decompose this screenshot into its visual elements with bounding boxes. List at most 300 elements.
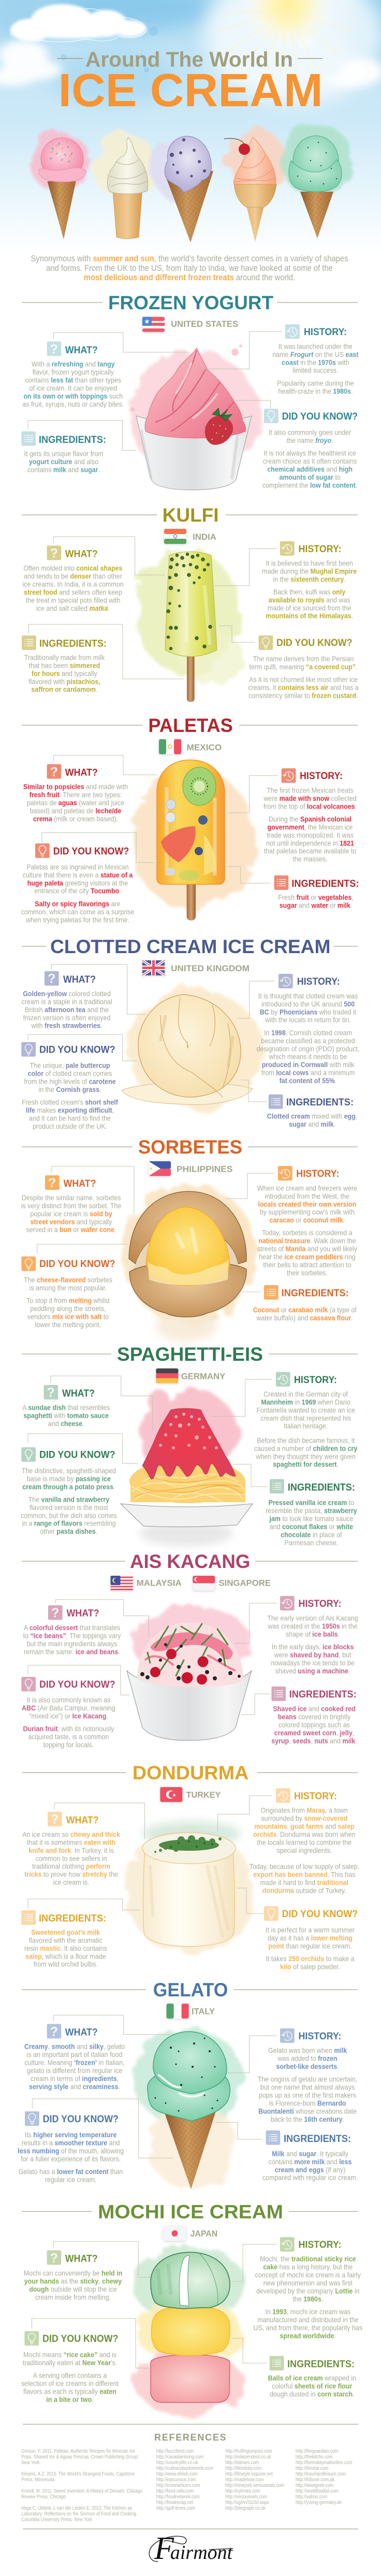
- text: what: and cheese.: [48, 1419, 84, 1428]
- text: history: The early version of Ais Kacang: [267, 1614, 358, 1622]
- text: what: [23, 1623, 121, 1656]
- icon: clock: [276, 1372, 290, 1387]
- text: web references column 2: http://independent.co.uk: [225, 2454, 271, 2459]
- text: web references column 3: http://thekitchn.com: [296, 2454, 333, 2459]
- text: history: Before the dish became famous, it: [257, 1436, 355, 1445]
- text: history: cake has a long history, but the: [263, 2263, 353, 2271]
- heading: did you know: DID YOU KNOW?: [276, 638, 352, 649]
- text: did you know: Salty or spicy flavorings are: [35, 900, 121, 908]
- text: web references column 3: http://young-germany.de: [296, 2499, 342, 2505]
- text: what: [21, 989, 112, 1030]
- icon: light bulb: [264, 1906, 279, 1921]
- text: history: [267, 1614, 358, 1675]
- flag: united states: UNITED STATES: [171, 319, 238, 329]
- text: web references column 3: [296, 2448, 353, 2505]
- heading: frozen yogurt: FROZEN YOGURT: [108, 292, 273, 313]
- intro text: [31, 254, 348, 282]
- text: history: shaved using a machine.: [275, 1667, 350, 1675]
- flag: philippines: PHILIPPINES: [177, 1164, 233, 1174]
- text: what: Despite the similar name, sorbetes: [22, 1193, 121, 1202]
- panel: history: [258, 2028, 357, 2123]
- text: history: is Florence-born Bernardo: [269, 2099, 346, 2107]
- text: history: Mochi, the traditional sticky rice: [260, 2255, 356, 2263]
- illustration: spaghetti ice cream: [121, 1388, 253, 1546]
- panel: what: [22, 341, 124, 408]
- panel: what: [22, 1385, 110, 1428]
- heading: history: HISTORY:: [294, 1375, 337, 1386]
- text: what: street food and sellers often keep: [24, 588, 122, 596]
- text: what: popular ice cream is sold by: [30, 1210, 112, 1218]
- text: did you know: when trying paletas for the first time.: [25, 916, 129, 924]
- text: ingredients: sugar and milk.: [289, 1120, 335, 1128]
- heading: did you know: DID YOU KNOW?: [282, 411, 358, 422]
- text: did you know: Fresh clotted cream's short shelf: [22, 1098, 118, 1106]
- text: web references column 1: http://ezinearticles.com: [156, 2482, 200, 2488]
- text: history: The first frozen Mexican treats: [267, 786, 354, 795]
- text: did you know: entrance of the city Tocumbo.: [34, 887, 121, 895]
- text: web references column 1: http://foodrecap.net: [156, 2499, 194, 2505]
- text: web references column 1: [156, 2448, 213, 2511]
- text: ingredients: Coconut or carabao milk (a type of: [253, 1306, 357, 1314]
- text: did you know: The distinctive, spaghetti-shaped: [22, 1466, 116, 1475]
- flag: malaysia: [111, 1576, 182, 1591]
- text: what: [22, 1403, 110, 1428]
- icon: question mark: [48, 1812, 62, 1827]
- icon: question mark: ?: [47, 1386, 55, 1400]
- icon: list: [21, 1910, 36, 1925]
- title: [57, 48, 323, 117]
- text: history: was added to frozen: [277, 2054, 337, 2063]
- text: book references: Klepeis, A.Z. 2015. The World's Strangest Foods. Capstone: [21, 2471, 135, 2477]
- illustration: blueberry scoop cone: [150, 136, 213, 242]
- flag: germany: [156, 1369, 226, 1383]
- panel: history: [257, 1166, 357, 1277]
- text: history: mountains of the Himalayas.: [266, 612, 353, 620]
- text: did you know: [18, 2131, 124, 2184]
- text: history: Mannheim in 1969 when Dario: [261, 1398, 350, 1406]
- text: web references column 2: http://seriouseats.com: [225, 2494, 268, 2499]
- text: did you know: peddling along the streets,: [30, 1304, 106, 1313]
- text: what: serving style and creaminess.: [29, 2082, 120, 2091]
- text: web references column 2: [225, 2448, 285, 2511]
- text: ingredients: flavored with pistachios,: [28, 678, 100, 685]
- text: web references column 3: http://travelandleisure.com: [296, 2471, 346, 2477]
- text: what: A colorful dessert that translates: [24, 1623, 120, 1632]
- panel: ingredients: [266, 1479, 357, 1547]
- panel: did you know: [21, 1257, 115, 1329]
- icon: light bulb: [21, 1042, 36, 1057]
- text: ingredients: flavored with the aromatic: [29, 1936, 102, 1945]
- text: did you know: point than regular ice cream.: [268, 1942, 352, 1950]
- text: history: introduced from the West, the: [265, 1192, 349, 1200]
- heading: sorbetes: SORBETES: [138, 1136, 242, 1158]
- text: web references column 3: http://yahoo.com: [296, 2494, 328, 2499]
- icon: light bulb: [21, 1257, 36, 1271]
- text: ingredients: from wild orchid bulbs.: [34, 1960, 98, 1968]
- text: ingredients: [24, 653, 105, 694]
- text: did you know: from the high levels of carotene: [24, 1077, 116, 1086]
- icon: question mark: [47, 545, 61, 560]
- text: did you know: The unique, pale buttercup: [30, 1061, 110, 1070]
- text: what: [24, 2042, 125, 2091]
- icon: light bulb: [25, 2111, 39, 2126]
- text: history: orchids. Dondurma was born when: [253, 1830, 355, 1838]
- text: what: as fruit, syrups, nuts or candy bites.: [22, 400, 124, 408]
- heading: ingredients: INGREDIENTS:: [284, 2134, 351, 2145]
- text: web references column 1: http://www.delish.com: [156, 2471, 198, 2477]
- icon: light bulb: [21, 1447, 36, 1462]
- text: did you know: It is perfect for a warm summer: [266, 1926, 355, 1934]
- heading: did you know: DID YOU KNOW?: [53, 846, 129, 857]
- text: what: [21, 1193, 121, 1234]
- panel: kulfi: [22, 505, 359, 702]
- text: did you know: As it is not churned like most other ice: [249, 675, 358, 684]
- panel: ingredients: [274, 875, 359, 910]
- text: history: national treasure. Walk down the: [258, 1236, 356, 1245]
- illustration: clotted cream scoop: [122, 989, 261, 1109]
- panel: references: [21, 2424, 358, 2529]
- text: what: Golden-yellow colored clotted: [23, 989, 111, 998]
- panel: ingredients: [21, 431, 106, 473]
- text: history: from local cows and a minimum: [261, 1069, 355, 1077]
- icon: list: [270, 1479, 284, 1493]
- flag: turkey: ★: [172, 1792, 177, 1797]
- heading: history: HISTORY:: [294, 1791, 337, 1802]
- text: history: sorbet-like desserts.: [276, 2062, 339, 2070]
- heading: did you know: DID YOU KNOW?: [42, 2334, 118, 2344]
- heading: references: REFERENCES: [154, 2433, 226, 2443]
- text: did you know: [262, 428, 357, 490]
- icon: clock: [280, 1596, 295, 1610]
- panel: did you know: [21, 843, 134, 924]
- panel: what: [24, 2250, 122, 2301]
- icon: question mark: [45, 971, 59, 986]
- heading: did you know: DID YOU KNOW?: [282, 1909, 358, 1920]
- heading: paletas: PALETAS: [148, 715, 233, 736]
- heading: what: WHAT?: [62, 1388, 95, 1399]
- text: history: It was launched under the: [279, 342, 353, 351]
- heading: clotted cream ice cream: CLOTTED CREAM ICE CREAM: [50, 936, 330, 957]
- text: did you know: topping for locals.: [43, 1740, 94, 1749]
- text: ingredients: Pressed vanilla ice cream to: [269, 1499, 354, 1507]
- text: did you know: common, which can come as a surprise: [21, 908, 134, 916]
- text: web references column 2: http://madehow.com: [225, 2477, 264, 2482]
- text: did you know: To stop it from melting whilst: [26, 1297, 110, 1305]
- intro text: Synonymous with summer and sun, the world's favorite dessert comes in a variety of shapes: [31, 254, 348, 264]
- hero: five ice cream cones: [30, 124, 353, 242]
- icon: light bulb: [264, 409, 279, 423]
- text: ingredients: jam to look like tomato sauce: [269, 1515, 353, 1523]
- icon: question mark: [45, 1175, 60, 1190]
- heading: what: WHAT?: [63, 974, 96, 985]
- text: ingredients: saffron or cardamom.: [31, 685, 97, 694]
- text: history: fat content of 55%.: [280, 1076, 336, 1085]
- text: did you know: cream choice as it often contains: [263, 457, 357, 465]
- text: did you know: [21, 863, 134, 924]
- text: history: trade was monopolized. It was: [267, 831, 354, 839]
- text: what: served in a bun or wafer cone.: [26, 1226, 116, 1234]
- icon: clock: [280, 541, 295, 556]
- text: history: was created in the 1950s in the: [267, 1622, 358, 1630]
- panel: ingredients: [22, 636, 107, 694]
- heading: did you know: DID YOU KNOW?: [39, 1449, 115, 1461]
- heading: history: HISTORY:: [296, 1169, 339, 1179]
- panel: what: [22, 545, 124, 612]
- text: what: traditional clothing perform: [32, 1862, 110, 1870]
- text: web references column 3: http://themalaymailonline.com: [296, 2459, 353, 2465]
- text: web references column 1: http://canadianliving.com: [156, 2454, 203, 2459]
- panel: what: [24, 2024, 125, 2091]
- heading: mochi ice cream: MOCHI ICE CREAM: [98, 2201, 283, 2222]
- text: history: limited success.: [292, 366, 338, 375]
- heading: what: WHAT?: [65, 2027, 98, 2038]
- panel: history: [254, 2237, 362, 2340]
- text: history: Fontanella wanted to create an ice: [256, 1406, 355, 1414]
- text: what: paletas de aguas (water and juice: [27, 799, 124, 807]
- text: did you know: Its higher serving temperature: [25, 2131, 117, 2139]
- text: did you know: The vanilla and strawberry: [28, 1495, 110, 1504]
- text: history: It is believed to have first been: [266, 559, 353, 567]
- panel: history: [263, 768, 357, 863]
- text: did you know: regular ice cream.: [45, 2176, 96, 2184]
- text: did you know: [22, 1696, 115, 1749]
- text: history: hear the ice cream peddlers ring: [259, 1253, 356, 1261]
- text: web references column 3: http://wisegeek.com: [296, 2482, 334, 2488]
- text: did you know: other pasta dishes.: [40, 1527, 97, 1535]
- text: history: made during the Mughal Empire: [262, 567, 357, 575]
- flag: united states: [142, 317, 238, 332]
- flag: italy: ITALY: [192, 2007, 215, 2017]
- text: did you know: color of clotted cream comes: [28, 1069, 112, 1077]
- flag: turkey: TURKEY: [186, 1790, 221, 1800]
- illustration: dondurma cylinder with pistachio: [124, 1821, 254, 1953]
- icon: question mark: ?: [50, 2024, 58, 2039]
- icon: list: [21, 431, 36, 446]
- text: ingredients: creamed sweet corn, jelly,: [274, 1729, 354, 1737]
- text: did you know: less numbing of the mouth, allowing: [18, 2147, 124, 2155]
- text: what: crema (milk or cream based).: [33, 815, 118, 823]
- panel: what: [21, 1175, 121, 1234]
- text: history: [263, 786, 357, 863]
- heading: ingredients: INGREDIENTS:: [39, 638, 107, 650]
- text: what: with fresh strawberries.: [31, 1021, 102, 1030]
- text: history: the 1980s.: [292, 2295, 323, 2303]
- text: did you know: complement the low fat content.: [262, 481, 357, 490]
- heading: history: HISTORY:: [298, 544, 342, 555]
- text: history: surrounded by snow-covered: [261, 1814, 347, 1822]
- heading: history: HISTORY:: [300, 771, 343, 782]
- text: ingredients: colored toppings such as: [279, 1721, 350, 1729]
- text: book references: Laboratory: Reflections on the Science of Food and Cooking.: [21, 2511, 137, 2516]
- text: what: [22, 564, 124, 612]
- panel: did you know: [21, 1447, 117, 1535]
- text: ingredients: dough dusted in corn starch.: [270, 2390, 355, 2398]
- flag: india: [164, 529, 216, 544]
- text: did you know: product outside of the UK.: [33, 1122, 107, 1130]
- text: ingredients: Clotted cream mixed with egg,: [267, 1112, 357, 1120]
- text: web references column 2: http://lifestyle.inquirer.net: [225, 2471, 273, 2477]
- text: did you know: in the Cornish grass.: [38, 1085, 101, 1093]
- text: what: remain the same: ice and beans.: [24, 1648, 120, 1656]
- heading: what: WHAT?: [67, 1608, 99, 1619]
- text: history: caused a number of children to cry: [254, 1444, 358, 1452]
- text: history: spread worldwide.: [280, 2332, 336, 2340]
- text: history: locals created their own version: [258, 1200, 356, 1208]
- panel: ingredients: [271, 1687, 357, 1745]
- hero: sky watercolor background: [0, 0, 381, 254]
- icon: light bulb: [24, 2331, 39, 2345]
- panel: what: [23, 764, 128, 823]
- panel: what: [21, 971, 112, 1030]
- illustration: sorbetes in a bun: [122, 1184, 256, 1342]
- flag: singapore: SINGAPORE: [218, 1578, 271, 1588]
- heading: ingredients: INGREDIENTS:: [282, 1288, 349, 1299]
- illustration: orange soft serve with cherry: [224, 129, 286, 242]
- heading: what: WHAT?: [63, 1178, 96, 1189]
- text: did you know: consistency similar to frozen custard.: [248, 692, 358, 700]
- heading: history: HISTORY:: [298, 1599, 342, 1609]
- flag: india: INDIA: [193, 532, 216, 542]
- panel: history: [272, 324, 359, 395]
- text: what: that it is sometimes eaten with: [27, 1838, 115, 1847]
- panel: history: [257, 974, 359, 1085]
- heading: ingredients: INGREDIENTS:: [288, 1483, 355, 1493]
- text: did you know: Durian fruit, with its notoriously: [23, 1724, 114, 1733]
- text: did you know: It is not always the healthiest ice: [263, 449, 356, 457]
- intro text: and forms. From the UK to the US, from Italy to India, we have looked at some of the: [46, 264, 333, 273]
- text: what: tricks to prove how stretchy the: [24, 1870, 118, 1878]
- text: what: Similar to popsicles and made with: [23, 783, 128, 791]
- text: history: nowadays the ice tends to be: [271, 1659, 355, 1667]
- flag: germany: GERMANY: [181, 1371, 226, 1381]
- text: web references column 1: http://food.ndtv.com: [156, 2488, 194, 2494]
- text: what: frozen version is often enjoyed: [23, 1014, 110, 1021]
- heading: ingredients: INGREDIENTS:: [39, 435, 106, 445]
- text: what: ice cream is.: [53, 1878, 90, 1887]
- text: what: but the main ingredients always: [27, 1639, 118, 1648]
- icon: question mark: ?: [51, 1812, 58, 1827]
- icon: cloud top left: [10, 4, 146, 42]
- text: history: their sorbetes.: [287, 1269, 328, 1277]
- heading: ingredients: INGREDIENTS:: [287, 2359, 355, 2370]
- text: ingredients: [267, 1112, 357, 1128]
- text: ingredients: [24, 450, 104, 473]
- text: did you know: The name derives from the Persian: [253, 655, 354, 663]
- text: ingredients: cream and eggs (if any): [275, 2166, 345, 2174]
- text: history: when they thought they were given: [255, 1452, 356, 1460]
- panel: did you know: [264, 1906, 358, 1971]
- panel: ais kacang: [21, 1551, 358, 1749]
- text: did you know: Paletas are so ingrained in Mexican: [26, 863, 129, 871]
- panel: what: [22, 1812, 121, 1887]
- title line 1: Around The World In: [85, 48, 293, 71]
- text: book references: Columbia University Press: New York: [21, 2516, 92, 2522]
- text: did you know: results in a smoother texture and: [22, 2139, 120, 2147]
- text: history: Back then, kulfi was only: [273, 588, 346, 596]
- heading: what: WHAT?: [65, 549, 98, 559]
- text: what: flavor, frozen yogurt typically: [33, 368, 114, 376]
- text: did you know: lower the melting point.: [35, 1320, 101, 1329]
- panel: did you know: [21, 1042, 118, 1130]
- text: history: with the locals in return for tin.: [265, 1016, 351, 1024]
- text: what: is very distinct from the sorbet. The: [21, 1202, 121, 1210]
- text: what: of ice cream. It can be enjoyed: [29, 384, 117, 392]
- text: did you know: flavors as each is typically eaten: [23, 2387, 116, 2396]
- text: history: streets of Manila and you will likely: [257, 1245, 357, 1253]
- text: history: made of ice sourced from the: [268, 604, 351, 612]
- text: what: Often molded into conical shapes: [23, 564, 123, 572]
- text: history: their bells to attract attention to: [263, 1261, 351, 1269]
- panel: ingredients: [267, 1095, 357, 1128]
- icon: clock: [280, 2028, 295, 2043]
- text: what: knife and fork. In Turkey, it is: [28, 1846, 114, 1854]
- text: web references column 2: http://sg/en/SG50.aspx: [225, 2499, 269, 2505]
- panel: history: [267, 1596, 358, 1675]
- text: history: the locals learned to combine the: [257, 1838, 351, 1847]
- text: history: Gelato was born when milk: [268, 2046, 347, 2054]
- text: did you know: [266, 1926, 355, 1971]
- text: what: cream is a staple in a traditional: [21, 998, 112, 1006]
- icon: cloud right: [327, 59, 381, 87]
- text: did you know: chemical additives and high: [267, 465, 353, 473]
- text: book references: Gerson, F. 2011. Paletas: Authentic Recipes for Mexican Ice: [21, 2448, 135, 2454]
- text: did you know: the name froyo.: [287, 436, 333, 444]
- panel: ingredients: [253, 1285, 357, 1322]
- heading: history: HISTORY:: [297, 976, 340, 987]
- icon: question mark: [47, 2250, 61, 2265]
- text: did you know: kilo of salep powder.: [280, 1963, 340, 1971]
- heading: did you know: DID YOU KNOW?: [39, 1679, 115, 1690]
- heading: what: WHAT?: [66, 1815, 99, 1826]
- title line 2: ICE CREAM: [58, 65, 323, 117]
- text: history: In 1998, Cornish clotted cream: [264, 1029, 352, 1037]
- heading: what: WHAT?: [65, 768, 98, 778]
- flag: malaysia: MALAYSIA: [137, 1578, 182, 1588]
- text: ingredients: [262, 2150, 358, 2182]
- text: did you know: [21, 1466, 117, 1535]
- text: history: pops up as one of the first makers: [259, 2091, 356, 2099]
- text: ingredients: for hours and typically: [32, 669, 97, 678]
- text: did you know: common, but the dish also comes: [21, 1512, 117, 1519]
- text: did you know: cream through a potato press.: [22, 1483, 115, 1491]
- text: ingredients: Traditionally made from milk: [24, 653, 105, 661]
- icon: light bulb: [35, 843, 50, 858]
- panel: ingredients: [268, 2356, 356, 2398]
- heading: ingredients: INGREDIENTS:: [291, 879, 359, 889]
- icon: cloud left: [0, 40, 62, 86]
- icon: list: [266, 2131, 280, 2145]
- text: did you know: day as it has a lower melting: [268, 1934, 353, 1942]
- text: did you know: huge paleta greeting visitors at the: [27, 879, 128, 887]
- illustration: strawberry: [205, 408, 233, 445]
- panel: did you know: [248, 636, 359, 700]
- text: did you know: [248, 655, 359, 700]
- icon: list: [22, 636, 36, 650]
- illustration: frozen yogurt cup with strawberry: [129, 344, 259, 490]
- text: book references: [21, 2448, 142, 2522]
- text: history: The origins of gelato are uncertain,: [258, 2075, 357, 2083]
- icon: question mark: ?: [48, 972, 55, 986]
- text: history: developed by the company Lottie in: [256, 2287, 360, 2295]
- heading: ingredients: INGREDIENTS:: [39, 1913, 106, 1924]
- logo: Fairmont: Fairmont: [154, 2531, 233, 2566]
- text: history: spaghetti for dessert.: [273, 1460, 339, 1469]
- text: ingredients: compared with regular ice cream.: [262, 2174, 358, 2182]
- text: ingredients: Fresh fruit or vegetables,: [278, 893, 354, 901]
- icon: list: [271, 1687, 286, 1701]
- text: book references: Press: Minnesota: [21, 2477, 55, 2482]
- text: ingredients: [253, 1306, 357, 1322]
